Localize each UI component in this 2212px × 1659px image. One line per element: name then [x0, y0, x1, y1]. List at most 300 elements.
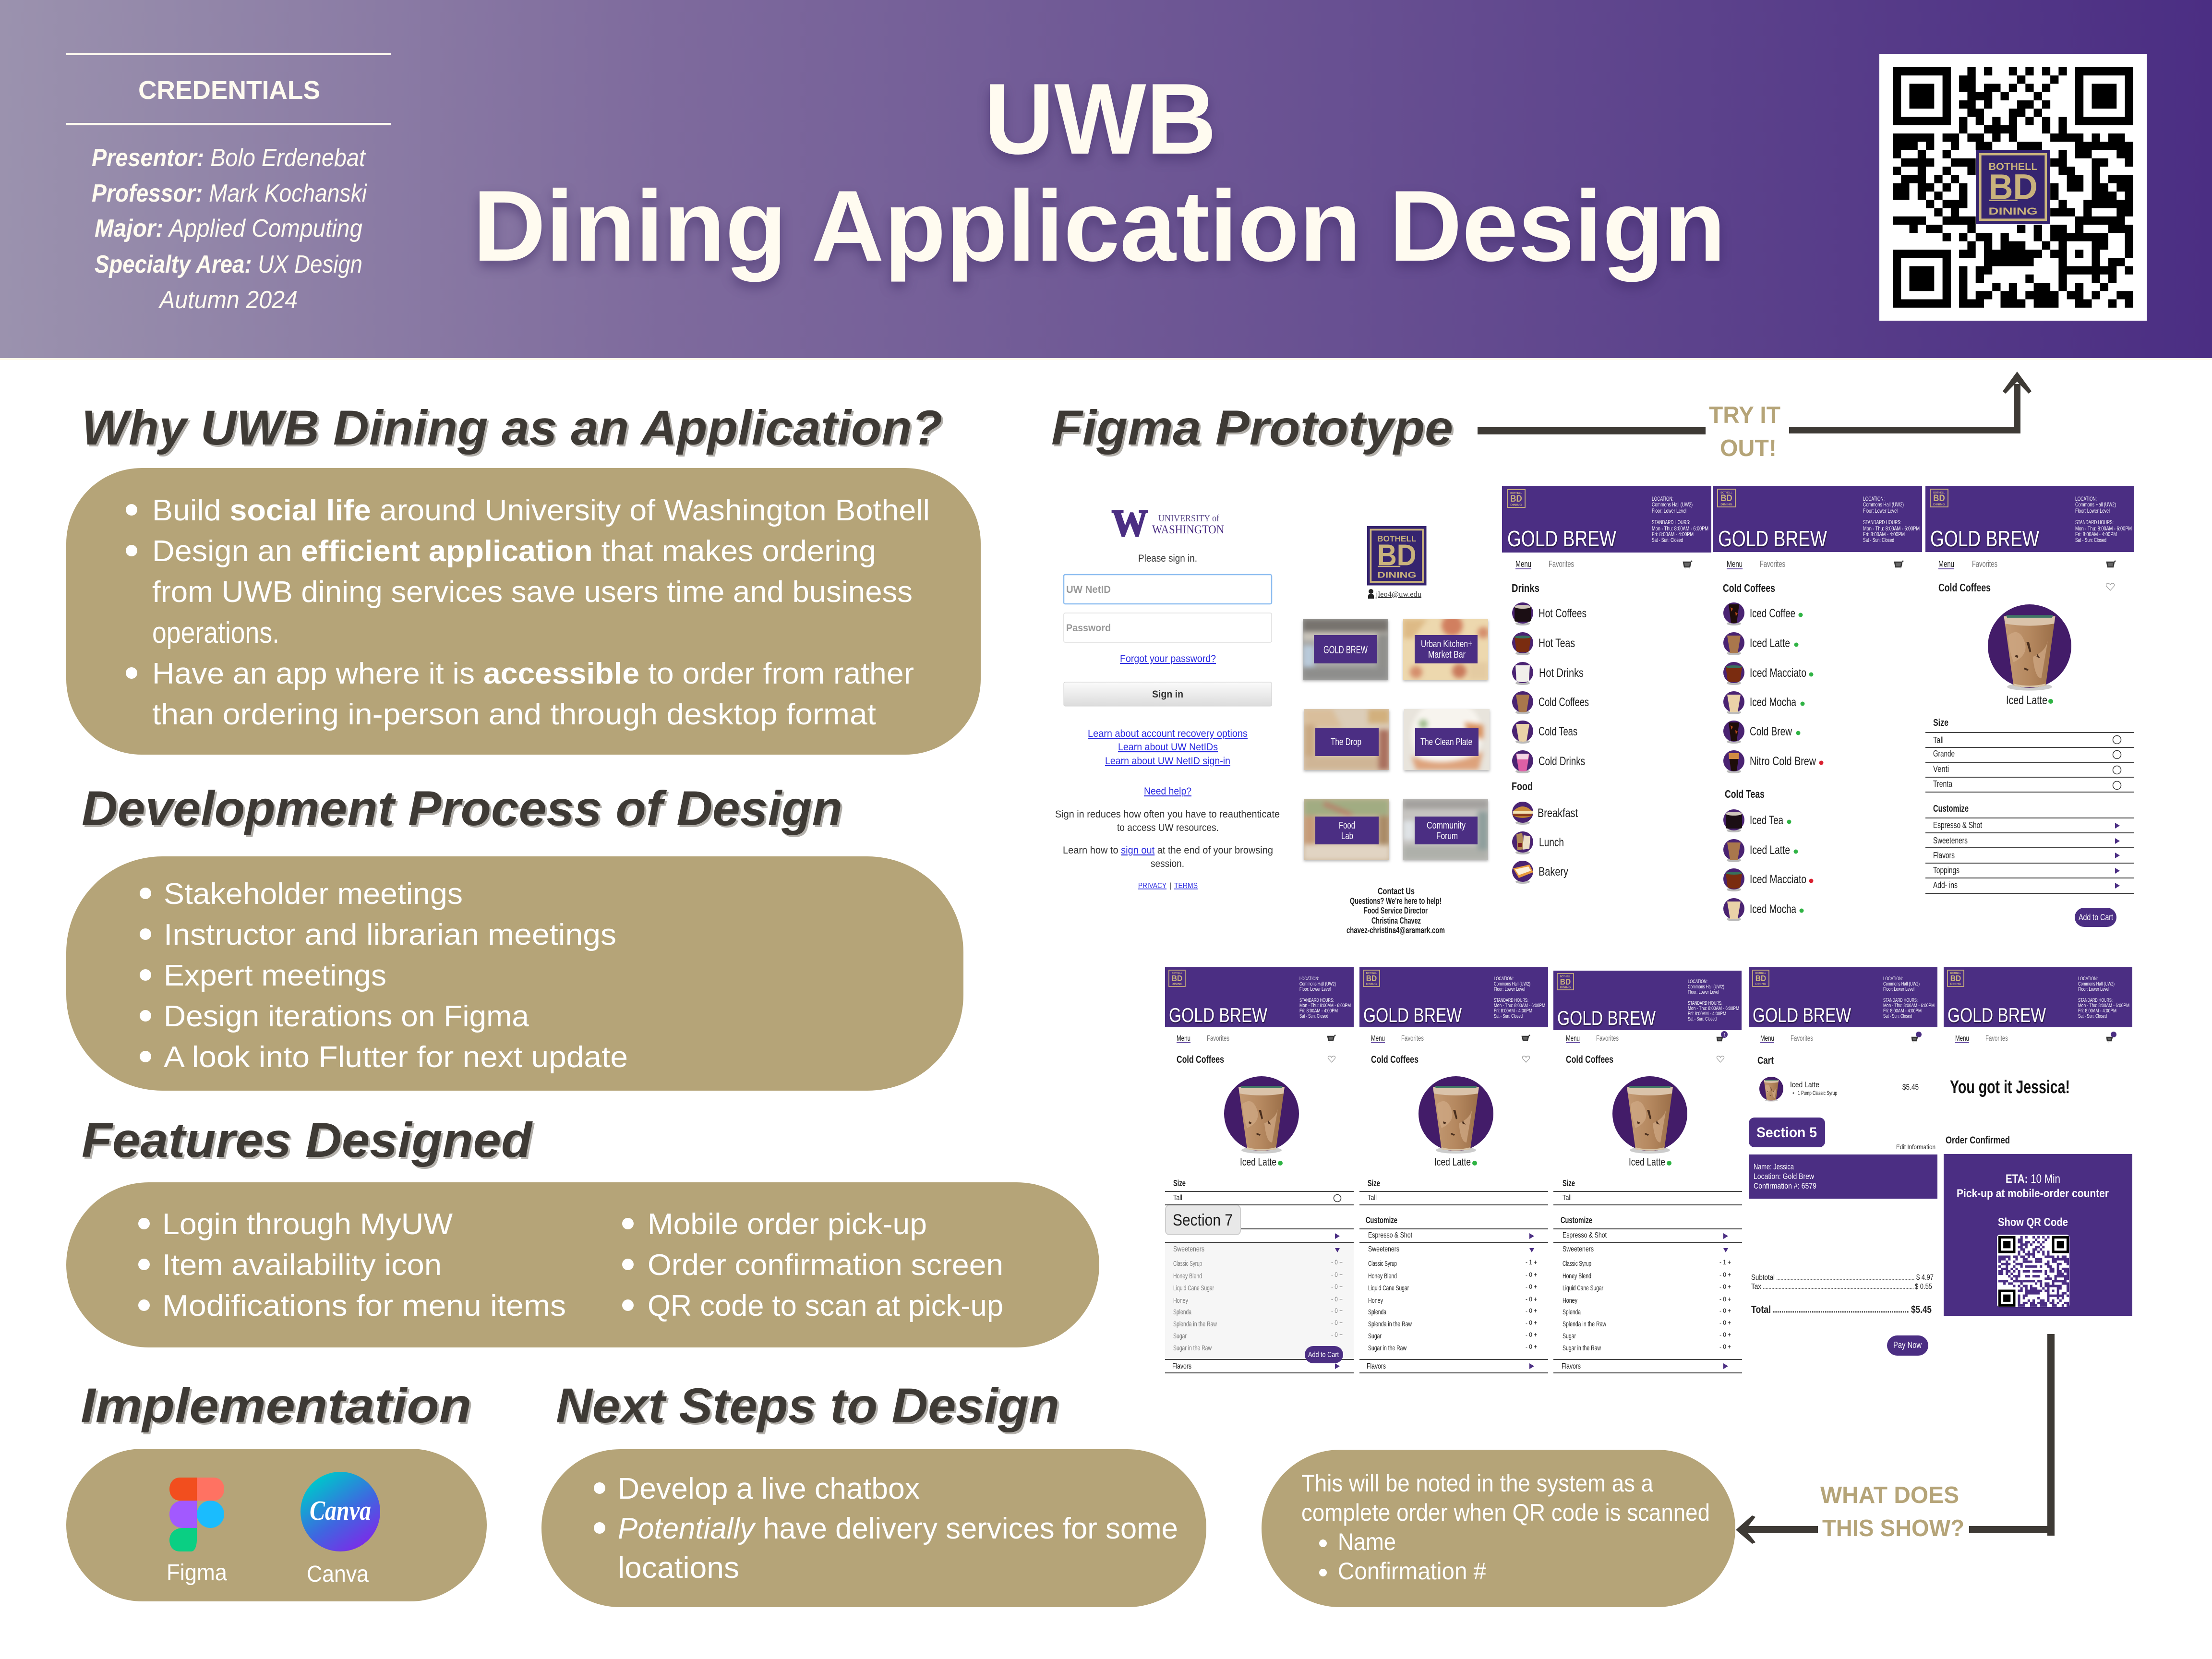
nav	[1177, 1034, 1335, 1043]
app header: BOTHELL	[1755, 972, 1766, 975]
phone: sweeteners expanded: Espresso & Shot	[1368, 1231, 1412, 1239]
phone: drinks menu: Hot Coffees	[1539, 607, 1587, 620]
panel: next steps: Develop a live chatbox	[618, 1472, 920, 1505]
credentials block: CREDENTIALS	[138, 76, 320, 105]
tile: Community Forum: Forum	[1436, 831, 1458, 842]
phone: added to cart: Tall	[1563, 1194, 1572, 1202]
nav	[1566, 1031, 1728, 1043]
app header: Floor: Lower Level	[1494, 986, 1525, 992]
label: try it out: TRY IT	[1709, 402, 1780, 428]
phone: cart	[1749, 967, 1937, 1356]
panel: QR scan explanation	[1262, 1450, 1735, 1607]
phone: drinks menu: Cold Drinks	[1539, 755, 1585, 768]
logo: Bothell Dining: DINING	[1377, 570, 1417, 579]
app header: Sat - Sun: Closed	[1883, 1013, 1912, 1019]
panel: features designed: Item availability icon	[162, 1249, 442, 1282]
order QR code	[1997, 1235, 2069, 1307]
credentials block: Autumn 2024	[158, 286, 298, 314]
phone: iced latte detail: Customize	[1933, 804, 1969, 814]
app header	[1749, 967, 1937, 1043]
phone: customize with Section 7 callout: Iced Latte	[1240, 1156, 1276, 1168]
app header: BOTHELL	[1560, 975, 1571, 978]
app header: BD	[1720, 493, 1732, 504]
app header: BOTHELL	[1510, 492, 1522, 495]
app header: DINING	[1720, 503, 1732, 506]
app header: Mon - Thu: 8:00AM - 6:00PM	[1688, 1006, 1739, 1011]
nav	[1938, 559, 2116, 569]
app header: Floor: Lower Level	[1652, 507, 1686, 514]
QR code with BD Dining logo: DINING	[1988, 205, 2038, 217]
phone: cart: 1 Pump Classic Syrup	[1798, 1090, 1837, 1096]
label: what does this show: WHAT DOES	[1820, 1482, 1959, 1508]
icon: Canva logo: Canva	[310, 1495, 371, 1526]
phone: added to cart: - 0 +	[1719, 1283, 1731, 1290]
app header	[1165, 967, 1354, 1027]
phone: customize with Section 7 callout: Customize	[1171, 1215, 1203, 1225]
app header: GOLD BREW	[1930, 526, 2039, 551]
phone: iced latte detail	[1925, 486, 2134, 927]
phone: drinks menu: Food	[1512, 780, 1533, 793]
panel: implementation: Figma	[167, 1560, 227, 1586]
sweeteners panel: Honey	[1173, 1297, 1188, 1305]
phone: added to cart: Classic Syrup	[1563, 1260, 1591, 1268]
screen: UW sign in: Learn about UW NetID sign-in	[1105, 756, 1230, 767]
phone: added to cart: - 0 +	[1719, 1331, 1731, 1338]
header banner	[0, 0, 2212, 360]
heading: Implementation: Implementation	[81, 1378, 471, 1433]
phone: sweeteners expanded: Liquid Cane Sugar	[1368, 1284, 1409, 1292]
sweeteners panel: Honey Blend	[1173, 1272, 1202, 1280]
app header: Floor: Lower Level	[2078, 986, 2109, 992]
tile: Urban Kitchen: Market Bar	[1428, 649, 1466, 660]
phone: added to cart: - 0 +	[1719, 1319, 1731, 1326]
screen: UW sign in: session.	[1151, 858, 1184, 869]
order totals: Tax	[1751, 1283, 1761, 1291]
nav	[1515, 559, 1692, 569]
panel: why UWB dining: Have an app where it is accessible to order from rather	[152, 657, 914, 690]
contact block: chavez-christina4@aramark.com	[1346, 926, 1445, 935]
customer info box: Confirmation #: 6579	[1754, 1181, 1816, 1190]
callout: Section 5: Section 5	[1756, 1125, 1817, 1141]
phone: added to cart: Size	[1563, 1178, 1575, 1188]
phone: sweeteners expanded: Flavors	[1367, 1362, 1386, 1370]
phone: drinks menu	[1502, 486, 1711, 884]
arrow: try it out	[1478, 372, 2032, 434]
phone: iced latte detail: Sweeteners	[1933, 836, 1968, 845]
app header: Mon - Thu: 8:00AM - 6:00PM	[2078, 1003, 2129, 1009]
panel: QR scan explanation: This will be noted in the system as a	[1301, 1470, 1653, 1497]
nav: Menu	[1727, 559, 1743, 569]
phone: sweeteners expanded: Classic Syrup	[1368, 1260, 1397, 1268]
panel: features designed: Modifications for menu items	[162, 1289, 566, 1322]
sweeteners panel: Sugar	[1173, 1332, 1187, 1340]
nav: Menu	[1177, 1034, 1190, 1043]
panel: features designed: QR code to scan at pick-up	[648, 1289, 1003, 1322]
phone: added to cart: Sweeteners	[1563, 1245, 1594, 1253]
app header: BD	[1366, 974, 1377, 983]
contact block: Contact Us	[1378, 887, 1415, 897]
app header: Favorites	[1791, 1034, 1813, 1043]
user email: jleo4@uw.edu	[1375, 590, 1421, 599]
pay now button	[1887, 1335, 1928, 1356]
phone: order confirmed: You got it Jessica!	[1950, 1077, 2070, 1097]
phone: added to cart	[1553, 971, 1742, 1373]
phone: iced latte detail: Add- ins	[1933, 880, 1958, 890]
phone: sweeteners expanded: Size	[1368, 1178, 1380, 1188]
phone: cold coffees list: Iced Macciato	[1750, 666, 1806, 680]
app header: Fri: 8:00AM - 4:00PM	[2075, 531, 2117, 538]
callout: Section 7	[1166, 1205, 1240, 1235]
QR code with BD Dining logo: BD	[1988, 167, 2038, 206]
phone: iced latte detail: Trenta	[1933, 779, 1953, 789]
pay now button: Pay Now	[1893, 1340, 1922, 1350]
phone: cold coffees list: Iced Tea	[1750, 814, 1783, 827]
panel: QR scan explanation: complete order when QR code is scanned	[1301, 1499, 1710, 1526]
panel: development process	[66, 856, 963, 1091]
phone: cold coffees list: Iced Macciato	[1750, 873, 1806, 886]
app header: STANDARD HOURS:	[1688, 1000, 1722, 1006]
app header: Fri: 8:00AM - 4:00PM	[1688, 1011, 1726, 1017]
heading: Development Process: Development Process of Design	[82, 781, 842, 836]
app header: DINING	[1366, 983, 1377, 986]
panel: why UWB dining: Design an efficient application that makes ordering	[152, 535, 876, 568]
nav: Favorites	[1760, 559, 1785, 569]
order totals: Total	[1751, 1304, 1771, 1315]
add to cart button: Add to Cart	[2079, 913, 2113, 922]
phone: iced latte detail: Size	[1933, 718, 1948, 728]
label: what does this show	[1820, 1482, 1964, 1541]
heading: Features Designed: Features Designed	[82, 1113, 533, 1167]
app header: Fri: 8:00AM - 4:00PM	[2078, 1008, 2116, 1014]
phone: drinks menu: Cold Coffees	[1539, 696, 1589, 709]
tile: Community Forum	[1403, 799, 1488, 860]
logo: Bothell Dining: BD	[1377, 539, 1417, 572]
phone: customize with Section 7 callout: Cold Coffees	[1177, 1054, 1224, 1065]
phone: added to cart: Customize	[1561, 1215, 1592, 1225]
phone: added to cart: Splenda in the Raw	[1563, 1320, 1606, 1328]
phone: iced latte detail: Iced Latte	[2006, 694, 2047, 707]
order totals: Subtotal	[1751, 1274, 1775, 1282]
app header: DINING	[1950, 983, 1961, 986]
order totals: $5.45	[1911, 1304, 1932, 1315]
sweeteners panel: - 0 +	[1331, 1307, 1343, 1314]
tile: The Drop	[1304, 709, 1389, 770]
phone: added to cart: Sugar	[1563, 1332, 1576, 1340]
phone: cold coffees list: Iced Mocha	[1750, 902, 1796, 916]
app header: BD	[1172, 974, 1182, 983]
screen: UW sign in: UW NetID	[1066, 584, 1111, 595]
app header: Floor: Lower Level	[2075, 507, 2110, 514]
app header: Floor: Lower Level	[1863, 507, 1898, 514]
panel: why UWB dining: from UWB dining services save users time and business	[152, 576, 913, 609]
tile: Gold Brew	[1303, 619, 1388, 680]
app header: BOTHELL	[1950, 972, 1961, 975]
order confirmation box	[1944, 1154, 2132, 1316]
screen: UW sign in	[1055, 502, 1280, 890]
panel: features designed	[66, 1182, 1099, 1347]
app header: GOLD BREW	[1718, 526, 1827, 551]
phone: added to cart: Honey Blend	[1563, 1272, 1591, 1280]
credentials block: Presentor: Bolo Erdenebat	[92, 144, 366, 172]
tile: Community Forum: Community	[1427, 820, 1466, 831]
app header: Commons Hall (UW2)	[1299, 981, 1336, 987]
title: UWB	[984, 62, 1216, 175]
phone: added to cart: - 1 +	[1719, 1258, 1731, 1266]
sweeteners panel: Liquid Cane Sugar	[1173, 1284, 1214, 1292]
app header: Menu	[1760, 1034, 1774, 1043]
screen: UW sign in: Learn about UW NetIDs	[1118, 742, 1218, 753]
panel: why UWB dining: Build social life around University of Washington Bothell	[152, 494, 930, 527]
app header	[1713, 486, 1922, 552]
sweeteners panel: Sweeteners	[1173, 1245, 1204, 1253]
panel: why UWB dining	[66, 468, 981, 755]
app header: GOLD BREW	[1753, 1004, 1851, 1026]
label: what does this show: THIS SHOW?	[1822, 1515, 1964, 1541]
phone: sweeteners expanded: Sugar in the Raw	[1368, 1344, 1407, 1352]
panel: QR scan explanation: Confirmation #	[1338, 1558, 1486, 1585]
app header: Floor: Lower Level	[1688, 989, 1719, 995]
nav	[1727, 559, 1903, 569]
nav: Menu	[1938, 559, 1954, 569]
panel: why UWB dining: operations.	[152, 616, 279, 649]
app header: Sat - Sun: Closed	[2078, 1013, 2107, 1019]
app header: LOCATION:	[1883, 976, 1903, 982]
app header	[1502, 486, 1711, 553]
phone: sweeteners expanded: - 0 +	[1526, 1283, 1537, 1290]
phone: customize with Section 7 callout: Tall	[1173, 1194, 1182, 1202]
credentials block	[66, 53, 391, 314]
app header: Commons Hall (UW2)	[2075, 501, 2116, 508]
panel: implementation	[66, 1449, 487, 1601]
panel: next steps: Potentially have delivery services for some	[618, 1512, 1178, 1545]
phone: iced latte detail: Venti	[1933, 764, 1949, 774]
app header: DINING	[1510, 504, 1522, 506]
app header: Mon - Thu: 8:00AM - 6:00PM	[1494, 1003, 1545, 1009]
contact block: Questions? We're here to help!	[1350, 896, 1442, 906]
phone: drinks menu: Hot Teas	[1539, 637, 1575, 650]
app header: GOLD BREW	[1948, 1004, 2046, 1026]
phone: sweeteners expanded: Splenda in the Raw	[1368, 1320, 1412, 1328]
app header: GOLD BREW	[1507, 526, 1616, 551]
phone: cold coffees list: Iced Coffee	[1750, 607, 1795, 620]
tile: Food Lab: Food	[1339, 820, 1355, 831]
phone: cold coffees list: Cold Coffees	[1723, 582, 1775, 594]
sweeteners panel: Sugar in the Raw	[1173, 1344, 1212, 1352]
app header: DINING	[1933, 503, 1945, 506]
phone: sweeteners expanded: Honey Blend	[1368, 1272, 1397, 1280]
phone: drinks menu: Cold Teas	[1539, 725, 1577, 738]
tile: Food Lab	[1304, 799, 1389, 860]
phone: sweeteners expanded: Tall	[1368, 1194, 1377, 1202]
app header: DINING	[1755, 983, 1766, 986]
screen: UW sign in: Learn about account recovery options	[1088, 728, 1248, 739]
order totals: $ 0.55	[1915, 1283, 1932, 1291]
screen: UW sign in: Please sign in.	[1138, 553, 1197, 564]
panel: implementation: Canva	[307, 1562, 369, 1587]
phone: iced latte detail: Toppings	[1933, 866, 1960, 875]
phone: drinks menu: Hot Drinks	[1539, 666, 1584, 680]
panel: development process: A look into Flutter for next update	[164, 1041, 628, 1074]
tile: The Clean Plate	[1404, 699, 1490, 770]
app header: LOCATION:	[2075, 495, 2097, 502]
phone: order confirmed: Order Confirmed	[1946, 1135, 2010, 1146]
screen: UW sign in: Need help?	[1144, 786, 1191, 797]
app header: LOCATION:	[1688, 979, 1707, 985]
app header: BOTHELL	[1720, 492, 1732, 494]
nav: Menu	[1515, 559, 1531, 569]
app header: LOCATION:	[2078, 976, 2098, 982]
app header: LOCATION:	[1863, 495, 1885, 502]
app header: Fri: 8:00AM - 4:00PM	[1494, 1008, 1532, 1014]
phone: sweeteners expanded: - 0 +	[1526, 1307, 1537, 1314]
panel: development process: Expert meetings	[164, 959, 386, 992]
panel: features designed: Login through MyUW	[162, 1208, 453, 1241]
phone: cold coffees list	[1713, 486, 1922, 921]
nav: Favorites	[1207, 1034, 1229, 1043]
tile: The Clean Plate: The Clean Plate	[1420, 737, 1472, 747]
app header: LOCATION:	[1494, 976, 1514, 982]
phone: sweeteners expanded	[1359, 967, 1548, 1373]
nav: Favorites	[1972, 559, 1997, 569]
phone: sweeteners expanded: Cold Coffees	[1371, 1054, 1419, 1065]
phone: sweeteners expanded: - 0 +	[1526, 1319, 1537, 1326]
phone: drinks menu: Drinks	[1512, 582, 1539, 594]
order confirmation box: Pick-up at mobile-order counter	[1957, 1187, 2109, 1200]
screen: UW sign in: PRIVACY	[1138, 882, 1166, 890]
phone: sweeteners expanded: - 1 +	[1526, 1258, 1537, 1266]
contact block: Food Service Director	[1364, 906, 1428, 915]
heading: Why UWB Dining: Why UWB Dining as an Application?	[82, 400, 942, 455]
sweeteners panel: - 0 +	[1331, 1271, 1343, 1278]
app header: Sat - Sun: Closed	[1688, 1016, 1717, 1022]
app header: BOTHELL	[1933, 492, 1945, 494]
sweeteners panel: - 0 +	[1331, 1283, 1343, 1290]
screen: UW sign in: Password	[1066, 623, 1111, 634]
label: try it out	[1709, 402, 1780, 461]
panel: development process: Design iterations on Figma	[164, 1000, 529, 1033]
phone: cold coffees list: Iced Latte	[1750, 843, 1790, 857]
customer info box	[1749, 1154, 1937, 1199]
app header: Mon - Thu: 8:00AM - 6:00PM	[1883, 1003, 1935, 1009]
screen: UW sign in: TERMS	[1174, 882, 1198, 890]
phone: sweeteners expanded: Sugar	[1368, 1332, 1382, 1340]
app header: Floor: Lower Level	[1883, 986, 1914, 992]
app header: GOLD BREW	[1557, 1007, 1656, 1029]
app header: Mon - Thu: 8:00AM - 6:00PM	[1652, 525, 1708, 532]
phone: cart: Iced Latte	[1790, 1080, 1819, 1089]
app header: DINING	[1172, 983, 1182, 986]
sweeteners panel: Splenda in the Raw	[1173, 1320, 1217, 1328]
app header: STANDARD HOURS:	[1863, 519, 1901, 526]
QR code with BD Dining logo	[1879, 54, 2147, 321]
app header: LOCATION:	[1652, 495, 1673, 502]
app header: STANDARD HOURS:	[1883, 998, 1918, 1003]
app header: Commons Hall (UW2)	[2078, 981, 2115, 987]
sweeteners panel: - 0 +	[1331, 1258, 1343, 1266]
app header: Commons Hall (UW2)	[1652, 501, 1693, 508]
customer info box: Name: Jessica	[1754, 1162, 1794, 1171]
callout: Section 5	[1749, 1118, 1825, 1147]
tile: Urban Kitchen	[1403, 615, 1489, 680]
phone: cold coffees list: Cold Teas	[1725, 788, 1765, 800]
add to cart button: Add to Cart	[1308, 1351, 1339, 1359]
app header: Sat - Sun: Closed	[2075, 537, 2106, 543]
order confirmation box: ETA: 10 Min	[2006, 1172, 2060, 1186]
phone: customize with Section 7 callout: Flavors	[1172, 1362, 1191, 1370]
app header: STANDARD HOURS:	[1494, 998, 1528, 1003]
credentials block: Specialty Area: UX Design	[95, 251, 362, 278]
screen: UW sign in: Sign in reduces how often you have to reauthenticate	[1055, 809, 1280, 820]
app header: Fri: 8:00AM - 4:00PM	[1299, 1008, 1338, 1014]
heading: Figma Prototype: Figma Prototype	[1051, 400, 1453, 455]
app header: Mon - Thu: 8:00AM - 6:00PM	[1863, 525, 1920, 532]
phone: cold coffees list: Cold Brew	[1750, 725, 1792, 738]
panel: development process: Instructor and librarian meetings	[164, 918, 616, 951]
credentials block: Professor: Mark Kochanski	[92, 180, 367, 207]
tile: Food Lab: Lab	[1341, 831, 1353, 842]
credentials block: Major: Applied Computing	[95, 215, 362, 242]
app header: Fri: 8:00AM - 4:00PM	[1652, 531, 1694, 538]
app header: STANDARD HOURS:	[1299, 998, 1334, 1003]
app header: Commons Hall (UW2)	[1863, 501, 1904, 508]
screen: UW sign in: W	[1112, 502, 1148, 544]
app header: BD	[1560, 977, 1571, 986]
phone: cart: $5.45	[1902, 1082, 1919, 1092]
sweeteners panel: Splenda	[1173, 1308, 1191, 1316]
phone: added to cart: Splenda	[1563, 1308, 1581, 1316]
app header: Favorites	[1985, 1034, 2008, 1043]
app header: Sat - Sun: Closed	[1299, 1013, 1328, 1019]
nav: Menu	[1566, 1034, 1580, 1043]
app header: DINING	[1560, 986, 1571, 989]
phone: added to cart: - 0 +	[1719, 1343, 1731, 1350]
app header: Fri: 8:00AM - 4:00PM	[1883, 1008, 1922, 1014]
add to cart button	[1305, 1346, 1343, 1363]
contact block	[1346, 887, 1445, 935]
sweeteners panel	[1165, 1243, 1354, 1359]
phone: cold coffees list: Nitro Cold Brew	[1750, 755, 1816, 768]
app header: BD	[1933, 493, 1945, 504]
phone: iced latte detail: Grande	[1933, 749, 1955, 758]
app header: LOCATION:	[1299, 976, 1319, 982]
title	[473, 62, 1726, 282]
phone: added to cart: Iced Latte	[1629, 1156, 1665, 1168]
icon: Canva logo	[301, 1472, 380, 1551]
panel: development process: Stakeholder meetings	[164, 878, 463, 911]
phone: sweeteners expanded: Customize	[1366, 1215, 1397, 1225]
phone: sweeteners expanded: Honey	[1368, 1297, 1383, 1305]
app header: STANDARD HOURS:	[1652, 519, 1690, 526]
logo: Bothell Dining	[1367, 526, 1427, 586]
screen: UW sign in: Learn how to sign out at the end of your browsing	[1063, 845, 1273, 856]
phone: cold coffees list: Iced Latte	[1750, 637, 1790, 650]
panel: QR scan explanation: Name	[1338, 1528, 1396, 1555]
order confirmation box: Show QR Code	[1998, 1216, 2068, 1229]
app header: Commons Hall (UW2)	[1883, 981, 1920, 987]
phone: iced latte detail: Cold Coffees	[1938, 581, 1991, 594]
app header: Floor: Lower Level	[1299, 986, 1331, 992]
phone: cart: Edit Information	[1896, 1143, 1936, 1151]
sweeteners panel: - 0 +	[1331, 1331, 1343, 1338]
app header	[1944, 967, 2132, 1043]
screen: dining locations	[1303, 526, 1490, 935]
phone: iced latte detail: Flavors	[1933, 851, 1955, 860]
app header: BD	[1510, 494, 1522, 504]
phone: iced latte detail: Tall	[1933, 735, 1944, 745]
app header: STANDARD HOURS:	[2078, 998, 2113, 1003]
add to cart button	[2075, 908, 2116, 927]
app header: BOTHELL	[1172, 972, 1182, 975]
